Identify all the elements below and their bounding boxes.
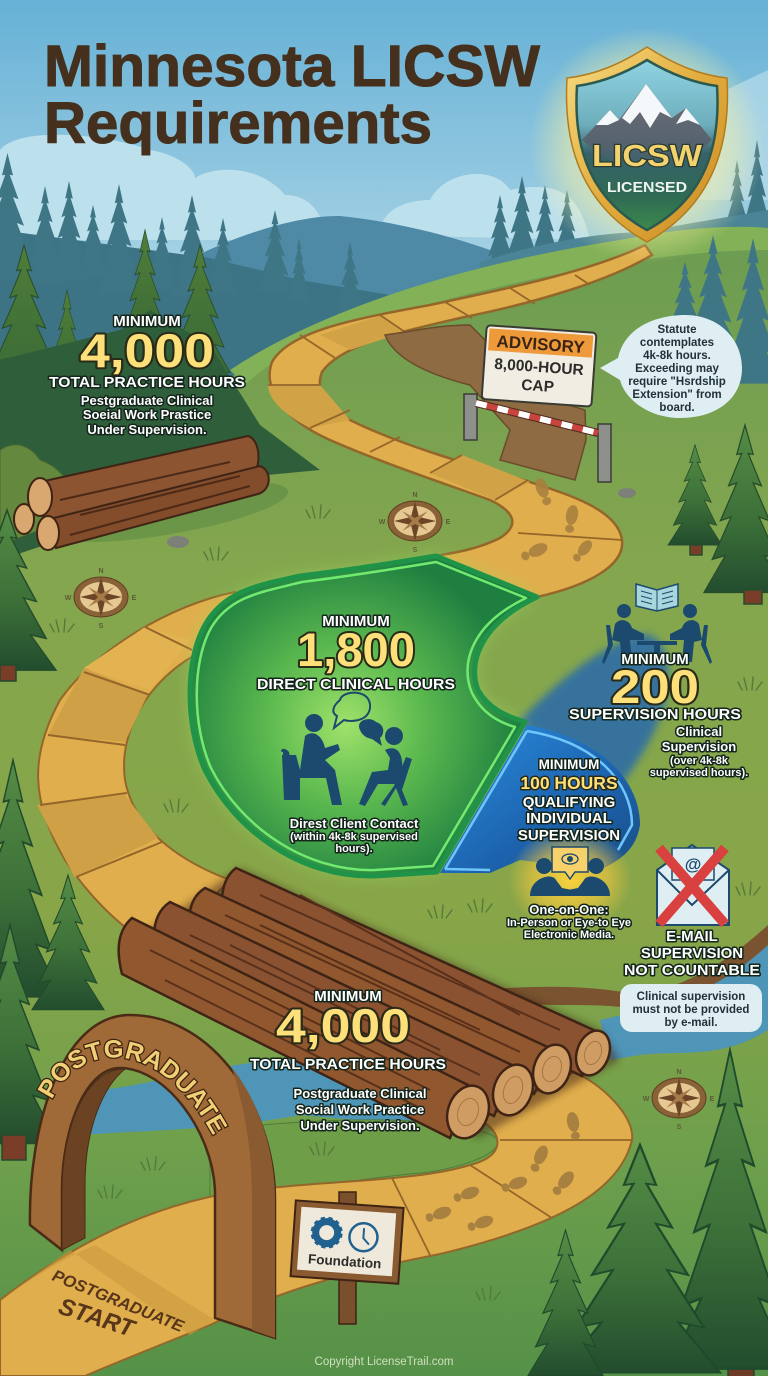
washed-out path section: [385, 325, 586, 480]
text block: direct clinical hours: (within 4k-8k supervised: [290, 831, 418, 843]
title: Minnesota LICSW: [44, 34, 540, 99]
badge: LICSW licensed shield: LICSW: [592, 138, 703, 173]
sign: postgraduate start painted on path: START: [55, 1293, 140, 1343]
copyright: Copyright LicenseTrail.com: [315, 1356, 453, 1368]
callout: hardship extension bubble: Statute: [658, 324, 696, 336]
icon: crossed-out e-mail: @: [685, 855, 701, 874]
text block: supervision hours: SUPERVISION HOURS: [569, 706, 741, 723]
text block: total practice hours, lower: Postgraduate Clinical: [294, 1086, 426, 1101]
callout: hardship extension bubble: Extension" from: [632, 389, 722, 401]
river bank: [480, 925, 768, 1010]
hill highlight: [230, 227, 768, 385]
text block: total practice hours, upper: Soeial Work Prastice: [83, 407, 211, 422]
callout: hardship extension bubble: board.: [659, 402, 695, 414]
log 4: [119, 918, 496, 1144]
log 3: [154, 902, 540, 1121]
sign: advisory 8,000-hour cap: 8,000-HOUR: [494, 356, 584, 379]
lower grass strip: [210, 1120, 498, 1210]
barrier: [464, 394, 611, 482]
log 2: [189, 888, 577, 1099]
text block: qualifying individual supervision: QUALIFYING: [523, 794, 615, 811]
sign: advisory 8,000-hour cap: ADVISORY: [496, 332, 586, 357]
text block: total practice hours, upper: Under Supervision.: [87, 422, 207, 437]
text block: qualifying individual supervision: 100 HOURS: [520, 773, 618, 793]
large green trees, upper left: [0, 230, 230, 399]
panel: direct clinical hours zone: [190, 556, 537, 876]
text block: total practice hours, upper: [49, 313, 245, 437]
sign: foundation: Foundation: [308, 1251, 382, 1271]
text block: supervision hours: Clinical: [676, 724, 722, 739]
log 1: [222, 868, 616, 1080]
text block: total practice hours, lower: MINIMUM: [314, 988, 382, 1005]
icon: two people in conversation: [281, 693, 412, 806]
text block: e-mail not countable: E-MAIL: [666, 928, 718, 945]
panel: stacked logs, upper: [14, 436, 292, 555]
compass rose: left: [65, 568, 137, 630]
callout: e-mail note: [620, 984, 762, 1032]
text block: qualifying individual supervision: One-on-One:: [529, 902, 609, 917]
foreground trees, bottom right: [528, 1050, 768, 1376]
text block: e-mail not countable: NOT COUNTABLE: [624, 962, 760, 979]
rocks: [167, 488, 636, 548]
text block: total practice hours, lower: [250, 988, 446, 1133]
text block: qualifying individual supervision: [507, 757, 631, 941]
text block: qualifying individual supervision: In-Person or Eye-to Eye: [507, 917, 631, 929]
footprints, upper: [519, 477, 595, 564]
text block: direct clinical hours: 1,800: [297, 623, 415, 676]
text block: direct clinical hours: Direst Client Contact: [290, 816, 419, 831]
text block: total practice hours, upper: MINIMUM: [113, 313, 181, 330]
callout: hardship extension bubble: 4k-8k hours.: [643, 350, 711, 362]
text block: supervision hours: supervised hours).: [650, 767, 748, 779]
bush: [0, 445, 72, 545]
panel: individual supervision zone: [440, 725, 640, 932]
text block: qualifying individual supervision: Electronic Media.: [524, 929, 614, 941]
text block: total practice hours, upper: 4,000: [80, 324, 214, 377]
river, right side: [600, 930, 768, 1060]
text block: total practice hours, lower: 4,000: [276, 999, 410, 1052]
text block: supervision hours: [569, 651, 748, 779]
text block: qualifying individual supervision: INDIVIDUAL: [526, 810, 612, 827]
text block: e-mail not countable: [624, 928, 760, 979]
path: upper switchback: [268, 245, 652, 597]
sky background: [0, 0, 768, 300]
text block: direct clinical hours: DIRECT CLINICAL HOURS: [257, 676, 455, 693]
text block: direct clinical hours: hours).: [335, 843, 373, 855]
panel: supervision zone backdrop: [515, 634, 668, 800]
footprints, lower: [424, 1111, 582, 1233]
arch: postgraduate gate: POSTGRADUATE: [36, 1038, 230, 1136]
glow behind badge: [529, 27, 765, 263]
panel: large log pile: [119, 868, 620, 1144]
river, middle: [80, 1060, 470, 1135]
distant tree line: right: [480, 140, 768, 300]
icon: one-on-one eye bubble: [530, 847, 610, 896]
text block: total practice hours, upper: TOTAL PRACTICE HOURS: [49, 374, 245, 391]
text block: qualifying individual supervision: MINIMUM: [539, 757, 599, 772]
compass rose: upper: [379, 492, 451, 554]
callout: hardship extension bubble: require "Hsrdship: [628, 376, 726, 388]
badge: LICSW licensed shield: [566, 47, 728, 242]
sign: postgraduate start painted on path: POSTGRADUATE: [50, 1267, 187, 1336]
text block: direct clinical hours: MINIMUM: [322, 613, 390, 630]
mid trees, right: [668, 425, 768, 604]
text block: total practice hours, lower: Social Work Practice: [296, 1102, 424, 1117]
arch: postgraduate gate: [28, 1014, 276, 1340]
callout: hardship extension bubble: Exceeding may: [635, 363, 719, 375]
text block: total practice hours, lower: TOTAL PRACTICE HOURS: [250, 1056, 446, 1073]
icon: supervision table with open book: [602, 584, 712, 665]
text block: e-mail not countable: SUPERVISION: [641, 945, 743, 962]
text block: supervision hours: 200: [611, 660, 699, 713]
text block: total practice hours, upper: Pestgraduate Clinical: [81, 393, 213, 408]
distant blue mountain: [170, 216, 620, 400]
text block: supervision hours: (over 4k-8k: [670, 755, 729, 767]
callout: hardship extension bubble: contemplates: [640, 337, 714, 349]
sign: advisory 8,000-hour cap: [482, 325, 597, 407]
far right teal trees: [668, 235, 768, 384]
title: Requirements: [44, 91, 432, 156]
distant tree line: left: [0, 153, 390, 400]
compass rose: lower right: [643, 1069, 715, 1131]
dark forest mass: [0, 310, 320, 560]
sign: foundation: [291, 1192, 404, 1324]
callout: hardship extension bubble: [600, 315, 742, 418]
callout: e-mail note: Clinical supervision: [637, 991, 745, 1003]
path: left sweep: [37, 592, 235, 950]
text block: supervision hours: MINIMUM: [621, 651, 689, 668]
text block: qualifying individual supervision: SUPERVISION: [518, 827, 620, 844]
icon: crossed-out e-mail: [657, 845, 729, 925]
title: [44, 34, 540, 156]
sign: advisory 8,000-hour cap: CAP: [521, 377, 555, 396]
callout: e-mail note: must not be provided: [633, 1004, 749, 1016]
callout: e-mail note: by e-mail.: [664, 1017, 718, 1029]
text block: total practice hours, lower: Under Supervision.: [300, 1118, 420, 1133]
path: bottom approach: [0, 1072, 632, 1376]
badge: LICSW licensed shield: LICENSED: [607, 179, 687, 196]
mid trees, left: [0, 510, 104, 1160]
grass tufts: [50, 505, 762, 1300]
text block: supervision hours: Supervision: [662, 739, 736, 754]
clouds: [0, 70, 768, 240]
text block: direct clinical hours: [257, 613, 455, 855]
